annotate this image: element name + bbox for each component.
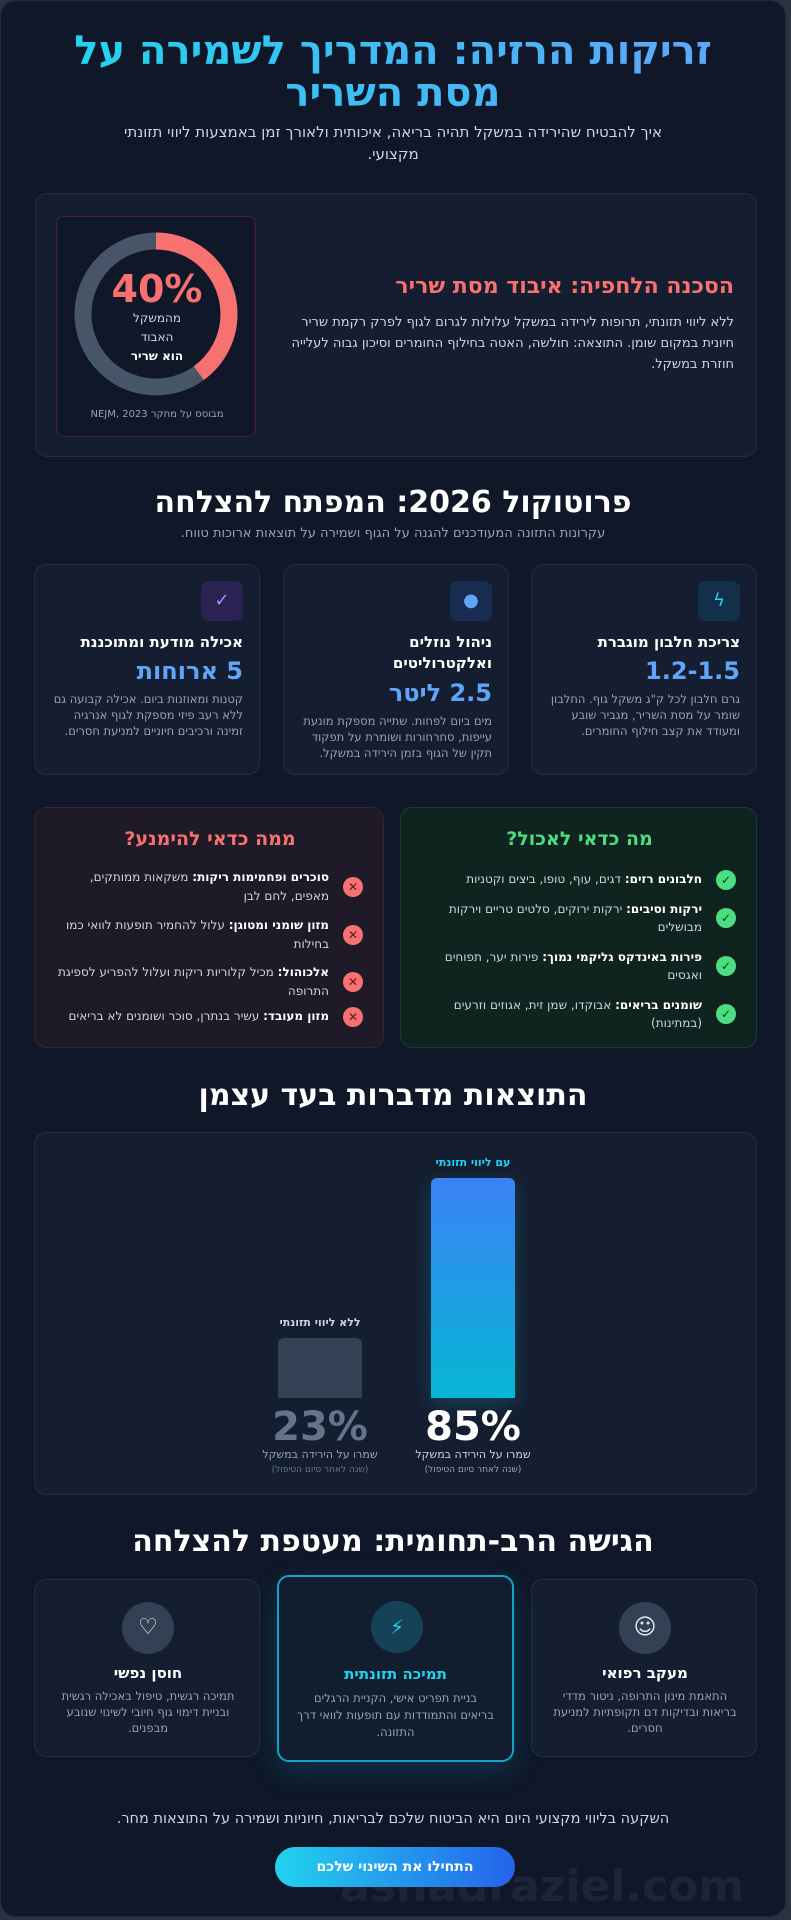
card title: מעקב רפואי xyxy=(602,1664,688,1682)
icon: droplet: ● xyxy=(463,590,479,611)
panel: mental resilience xyxy=(34,1579,260,1757)
icon: heart: ♡ xyxy=(138,1615,158,1640)
list: avoid items: מזון מעובד: עשיר בנתרן, סוכר ושומנים לא בריאים xyxy=(69,1009,329,1023)
list: avoid items xyxy=(58,870,363,1027)
subtitle: איך להבטיח שהירידה במשקל תהיה בריאה, איכותית ולאורך זמן באמצעות ליווי תזונתי מקצועי. xyxy=(124,123,662,163)
card title: חוסן נפשי xyxy=(114,1664,182,1682)
button: call to action: התחילו את השינוי שלכם xyxy=(317,1859,473,1875)
list: avoid items: אלכוהול: מכיל קלוריות ריקות ועלול להפריע לספיגת התרופה xyxy=(58,965,329,998)
heading: results: התוצאות מדברות בעד עצמן xyxy=(199,1078,587,1113)
bar: with nutrition support: (שנה לאחר סיום הטיפול) xyxy=(425,1465,521,1475)
bar chart xyxy=(34,1132,757,1495)
panel: hidden danger xyxy=(35,193,757,457)
bar: without nutrition support: שמרו על הירידה במשקל xyxy=(262,1448,378,1461)
description: התאמת מינון התרופה, ניטור מדדי בריאות ובדיקות דם תקופתיות למניעת חסרים. xyxy=(553,1689,737,1735)
donut chart: 40%: מהמשקל xyxy=(133,311,181,325)
bar: with nutrition support: 85% xyxy=(425,1404,521,1450)
bar: with nutrition support xyxy=(415,1156,531,1475)
bar: without nutrition support: ללא ליווי תזונתי xyxy=(279,1316,361,1329)
heading: מה כדאי לאכול? xyxy=(506,828,653,850)
icon: lightning xyxy=(698,581,740,621)
heading: multidisciplinary: הגישה הרב-תחומית: מעטפת להצלחה xyxy=(132,1524,654,1559)
card title: אכילה מודעת ומתוכננת xyxy=(81,633,243,651)
value: 2.5 ליטר xyxy=(389,679,492,707)
list: avoid items: ✕ xyxy=(348,975,358,989)
bar: without nutrition support xyxy=(262,1316,378,1475)
description: בניית תפריט אישי, הקניית הרגלים בריאים והתמודדות עם תופעות לוואי דרך התזונה. xyxy=(297,1691,494,1739)
description: מים ביום לפחות. שתייה מספקת מונעת עייפות, סחרחורות ושומרת על תפקוד תקין של הגוף בזמן הירידה במשקל. xyxy=(303,714,492,760)
donut chart: 40% xyxy=(56,216,256,437)
list: avoid items: ✕ xyxy=(348,928,358,942)
donut chart: 40%: 40% xyxy=(112,267,202,311)
list: eat items xyxy=(445,870,736,1030)
closing text: השקעה בליווי מקצועי היום היא הביטוח שלכם לבריאות, חיוניות ושמירה על התוצאות מחר. xyxy=(117,1811,669,1827)
panel: what to avoid xyxy=(34,807,384,1048)
watermark: ashadraziel.com xyxy=(340,1861,744,1912)
panel: what to eat xyxy=(400,807,757,1048)
value: 1.2-1.5 xyxy=(645,657,740,685)
list: eat items: ✓ xyxy=(721,1007,731,1021)
bar: without nutrition support: 23% xyxy=(272,1404,368,1450)
icon: person: ☺ xyxy=(634,1615,656,1640)
subheading: עקרונות התזונה המעודכנים להגנה על הגוף ושמירה על תוצאות ארוכות טווח. xyxy=(181,526,605,541)
bar: with nutrition support: עם ליווי תזונתי xyxy=(436,1156,510,1169)
icon: person xyxy=(619,1602,671,1654)
donut chart: 40%: מבוסס על מחקר NEJM, 2023 xyxy=(90,409,224,420)
icon: utensils: ⚡ xyxy=(390,1615,404,1639)
button: call to action xyxy=(275,1847,515,1887)
list: eat items: פירות באינדקס גליקמי נמוך: פירות יער, תפוחים ואגסים xyxy=(445,950,702,982)
list: eat items: ✓ xyxy=(721,873,731,887)
list: eat items: ✓ xyxy=(721,911,731,925)
panel: medical monitoring xyxy=(531,1579,757,1757)
icon: utensils xyxy=(371,1601,423,1653)
bar: without nutrition support: (שנה לאחר סיום הטיפול) xyxy=(272,1465,368,1475)
icon: check xyxy=(201,581,243,621)
bar: with nutrition support: שמרו על הירידה במשקל xyxy=(415,1448,531,1461)
value: 5 ארוחות xyxy=(137,657,243,685)
icon: lightning: ϟ xyxy=(713,590,725,611)
list: eat items: שומנים בריאים: אבוקדו, שמן זית, אגוזים וזרעים (במתינות) xyxy=(454,998,702,1030)
donut chart: 40%: האבוד xyxy=(141,330,173,344)
card title: תמיכה תזונתית xyxy=(344,1665,447,1683)
list: eat items: ירקות וסיבים: ירקות ירוקים, סלטים טריים וירקות מבושלים xyxy=(449,902,702,934)
heading: hidden danger: הסכנה הלחפיה: איבוד מסת שריר xyxy=(395,274,734,299)
description: תמיכה רגשית, טיפול באכילה רגשית ובניית דימוי גוף חיובי לשינוי שנובע מבפנים. xyxy=(62,1689,234,1735)
icon: check: ✓ xyxy=(214,590,230,611)
description: קטנות ומאוזנות ביום. אכילה קבועה גם ללא רעב פיזי מספקת לגוף אנרגיה זמינה ורכיבים חיוניים למניעת חסרים. xyxy=(54,692,243,738)
list: avoid items: ✕ xyxy=(348,1010,358,1024)
card title: צריכת חלבון מוגברת xyxy=(598,633,740,651)
panel: fluids xyxy=(283,564,509,775)
list: eat items: חלבונים רזים: דגים, עוף, טופו, ביצים וקטניות xyxy=(466,872,702,886)
card title: ניהול נוזלים ואלקטרוליטים xyxy=(393,633,492,672)
panel: nutrition support (highlighted) xyxy=(277,1575,514,1762)
list: avoid items: מזון שומני ומטוגן: עלול להחמיר תופעות לוואי כמו בחילות xyxy=(66,918,329,951)
heading: ממה כדאי להימנע? xyxy=(124,828,296,850)
panel: meals xyxy=(34,564,260,775)
panel: protein xyxy=(531,564,757,775)
text block: ללא ליווי תזונתי, תרופות לירידה במשקל עלולות לגרום לגוף לפרק רקמת שריר חיונית במקום שומן. התוצאה: חולשה, האטה בחילוף החומרים וסיכון גבוה לעלייה חוזרת במשקל. xyxy=(291,315,734,372)
list: avoid items: ✕ xyxy=(348,880,358,894)
donut chart: 40%: הוא שריר xyxy=(131,349,183,363)
heading: protocol 2026: פרוטוקול 2026: המפתח להצלחה xyxy=(154,485,632,520)
list: avoid items: סוכרים ופחמימות ריקות: משקאות ממותקים, מאפים, לחם לבן xyxy=(90,870,329,903)
icon: droplet xyxy=(450,581,492,621)
description: גרם חלבון לכל ק"ג משקל גוף. החלבון שומר על מסת השריר, מגביר שובע ומעודד את קצב חילוף החומרים. xyxy=(551,692,740,738)
icon: heart xyxy=(122,1602,174,1654)
list: eat items: ✓ xyxy=(721,959,731,973)
title: זריקות הרזיה: המדריך לשמירה על מסת השריר xyxy=(74,28,712,116)
